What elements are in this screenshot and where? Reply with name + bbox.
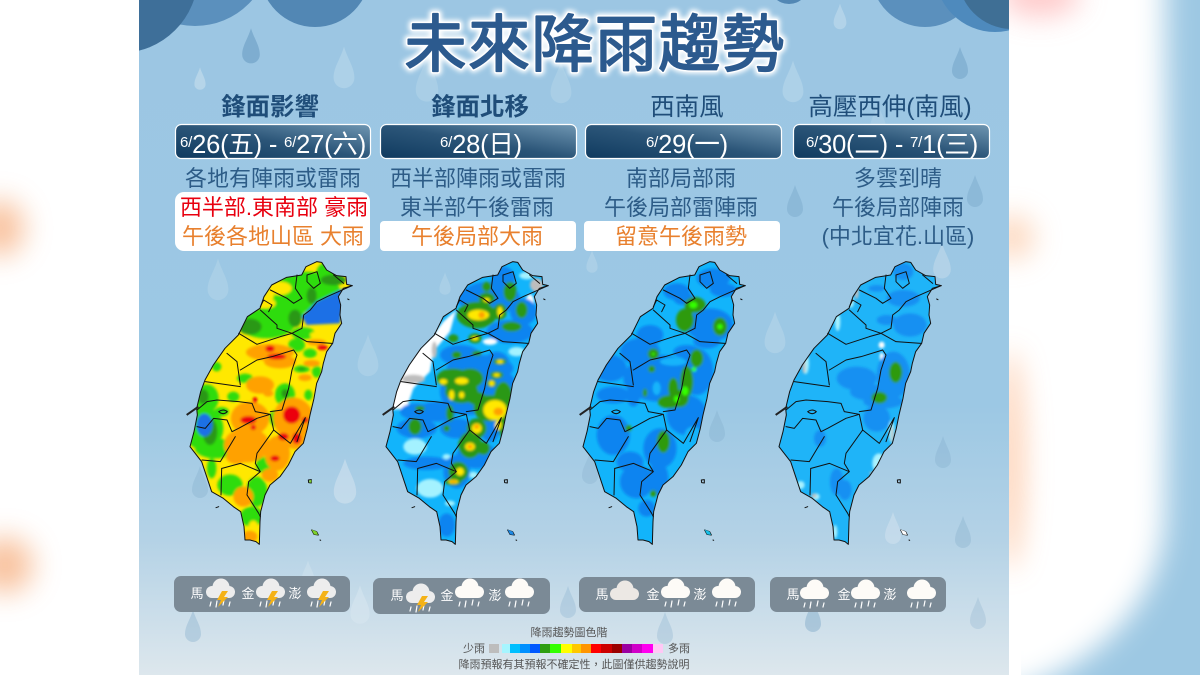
highlighted warning box: 西半部.東南部 豪雨 xyxy=(180,195,368,220)
date pill: 6/ xyxy=(180,134,193,151)
column 4 header: high pressure extends west: 午後局部陣雨 xyxy=(832,195,964,220)
date pill xyxy=(380,124,576,159)
forecast description: 各地有陣雨或雷雨 xyxy=(185,166,361,191)
forecast description: 多雲到晴 xyxy=(854,166,942,191)
forecast description: 南部局部雨 xyxy=(626,166,736,191)
rainfall colour legend: 降雨預報有其預報不確定性，此圖僅供趨勢說明 xyxy=(458,657,690,671)
title: 未來降雨趨勢 xyxy=(404,11,786,80)
date pill: 29(一) xyxy=(658,131,728,159)
icon: rain xyxy=(505,578,534,607)
column 2 header: front moving north: 東半部午後雷雨 xyxy=(400,195,554,220)
clouds at top xyxy=(139,0,1009,51)
outlying islands weather: column 4: 馬 xyxy=(786,587,800,602)
icon: rain xyxy=(455,578,484,607)
date pill xyxy=(794,124,990,159)
forecast description: 西半部陣雨或雷雨 xyxy=(390,166,566,191)
map: rainfall 6/26-6/27 xyxy=(186,261,353,545)
highlighted warning box: 午後局部大雨 xyxy=(411,224,543,249)
outlying islands weather: column 3 xyxy=(579,577,755,612)
heading: 西南風 xyxy=(650,93,724,121)
highlighted warning box: 留意午後雨勢 xyxy=(615,224,747,249)
highlighted warning box: 午後各地山區 大雨 xyxy=(182,224,364,249)
column 1 header: front influence xyxy=(175,93,370,251)
outlying islands weather: column 2: 馬 xyxy=(390,588,404,603)
column 3 header: southwest wind: 午後局部雷陣雨 xyxy=(604,195,758,220)
title: 未來降雨趨勢 xyxy=(404,11,786,80)
icon: rain xyxy=(907,580,936,608)
date pill: 7/ xyxy=(910,134,923,151)
map: rainfall 6/29 xyxy=(579,261,746,545)
highlighted warning box xyxy=(380,221,576,251)
outlying islands weather: column 1: 澎 xyxy=(288,586,302,601)
outlying islands weather: column 1 xyxy=(174,576,350,612)
icon: thunderstorm xyxy=(406,584,435,612)
rainfall colour legend: 多雨 xyxy=(668,641,690,655)
highlighted warning box xyxy=(584,221,780,251)
icon: cloud xyxy=(610,580,639,600)
title: 未來降雨趨勢 xyxy=(404,11,786,80)
date pill: 6/ xyxy=(646,134,659,151)
outlying islands weather: column 1: 金 xyxy=(241,586,255,601)
date pill xyxy=(176,124,370,159)
outlying islands weather: column 1: 馬 xyxy=(190,586,204,601)
outlying islands weather: column 4: 金 xyxy=(837,587,851,602)
map: rainfall 6/28 xyxy=(382,261,549,545)
outlying islands weather: column 3: 澎 xyxy=(693,587,707,602)
heading: 高壓西伸(南風) xyxy=(808,93,972,121)
icon: rain xyxy=(800,580,829,608)
column 3 header: southwest wind xyxy=(584,93,782,251)
outlying islands weather: column 2 xyxy=(373,578,550,614)
date pill: 26(五) - xyxy=(192,131,284,159)
raindrops xyxy=(185,4,986,644)
rainfall colour legend: 少雨 xyxy=(463,642,485,655)
heading: 鋒面北移 xyxy=(431,93,529,121)
rainfall colour legend: 降雨趨勢圖色階 xyxy=(530,625,608,639)
date pill: 6/ xyxy=(806,134,819,151)
outlying islands weather: column 4: 澎 xyxy=(883,587,897,602)
date pill: 6/ xyxy=(284,134,297,151)
column 4 header: high pressure extends west: (中北宜花.山區) xyxy=(822,224,974,249)
outlying islands weather: column 2: 金 xyxy=(440,588,454,603)
date pill: 1(三) xyxy=(922,131,978,159)
date pill: 6/ xyxy=(440,134,453,151)
date pill: 30(二) - xyxy=(818,131,910,159)
outlying islands weather: column 2: 澎 xyxy=(488,588,502,603)
date pill: 27(六) xyxy=(296,131,366,159)
icon: rain xyxy=(851,580,880,608)
date pill xyxy=(586,124,782,159)
main panel xyxy=(139,0,1009,675)
icon: rain xyxy=(661,578,690,607)
highlighted warning box xyxy=(175,192,370,251)
outlying islands weather: column 3: 馬 xyxy=(595,587,609,602)
outlying islands weather: column 4 xyxy=(770,577,946,612)
colour scale xyxy=(489,644,663,653)
icon: thunderstorm xyxy=(206,578,235,607)
date pill: 28(日) xyxy=(452,131,522,159)
column 2 header: front moving north xyxy=(380,93,576,251)
heading: 鋒面影響 xyxy=(221,93,319,121)
icon: thunderstorm xyxy=(256,578,285,607)
rainfall colour legend xyxy=(458,625,690,671)
icon: rain xyxy=(712,578,741,607)
icon: thunderstorm xyxy=(307,578,336,607)
outlying islands weather: column 3: 金 xyxy=(646,587,660,602)
column 4 header: high pressure extends west xyxy=(794,93,990,249)
map: rainfall 6/30-7/1 xyxy=(775,261,942,545)
